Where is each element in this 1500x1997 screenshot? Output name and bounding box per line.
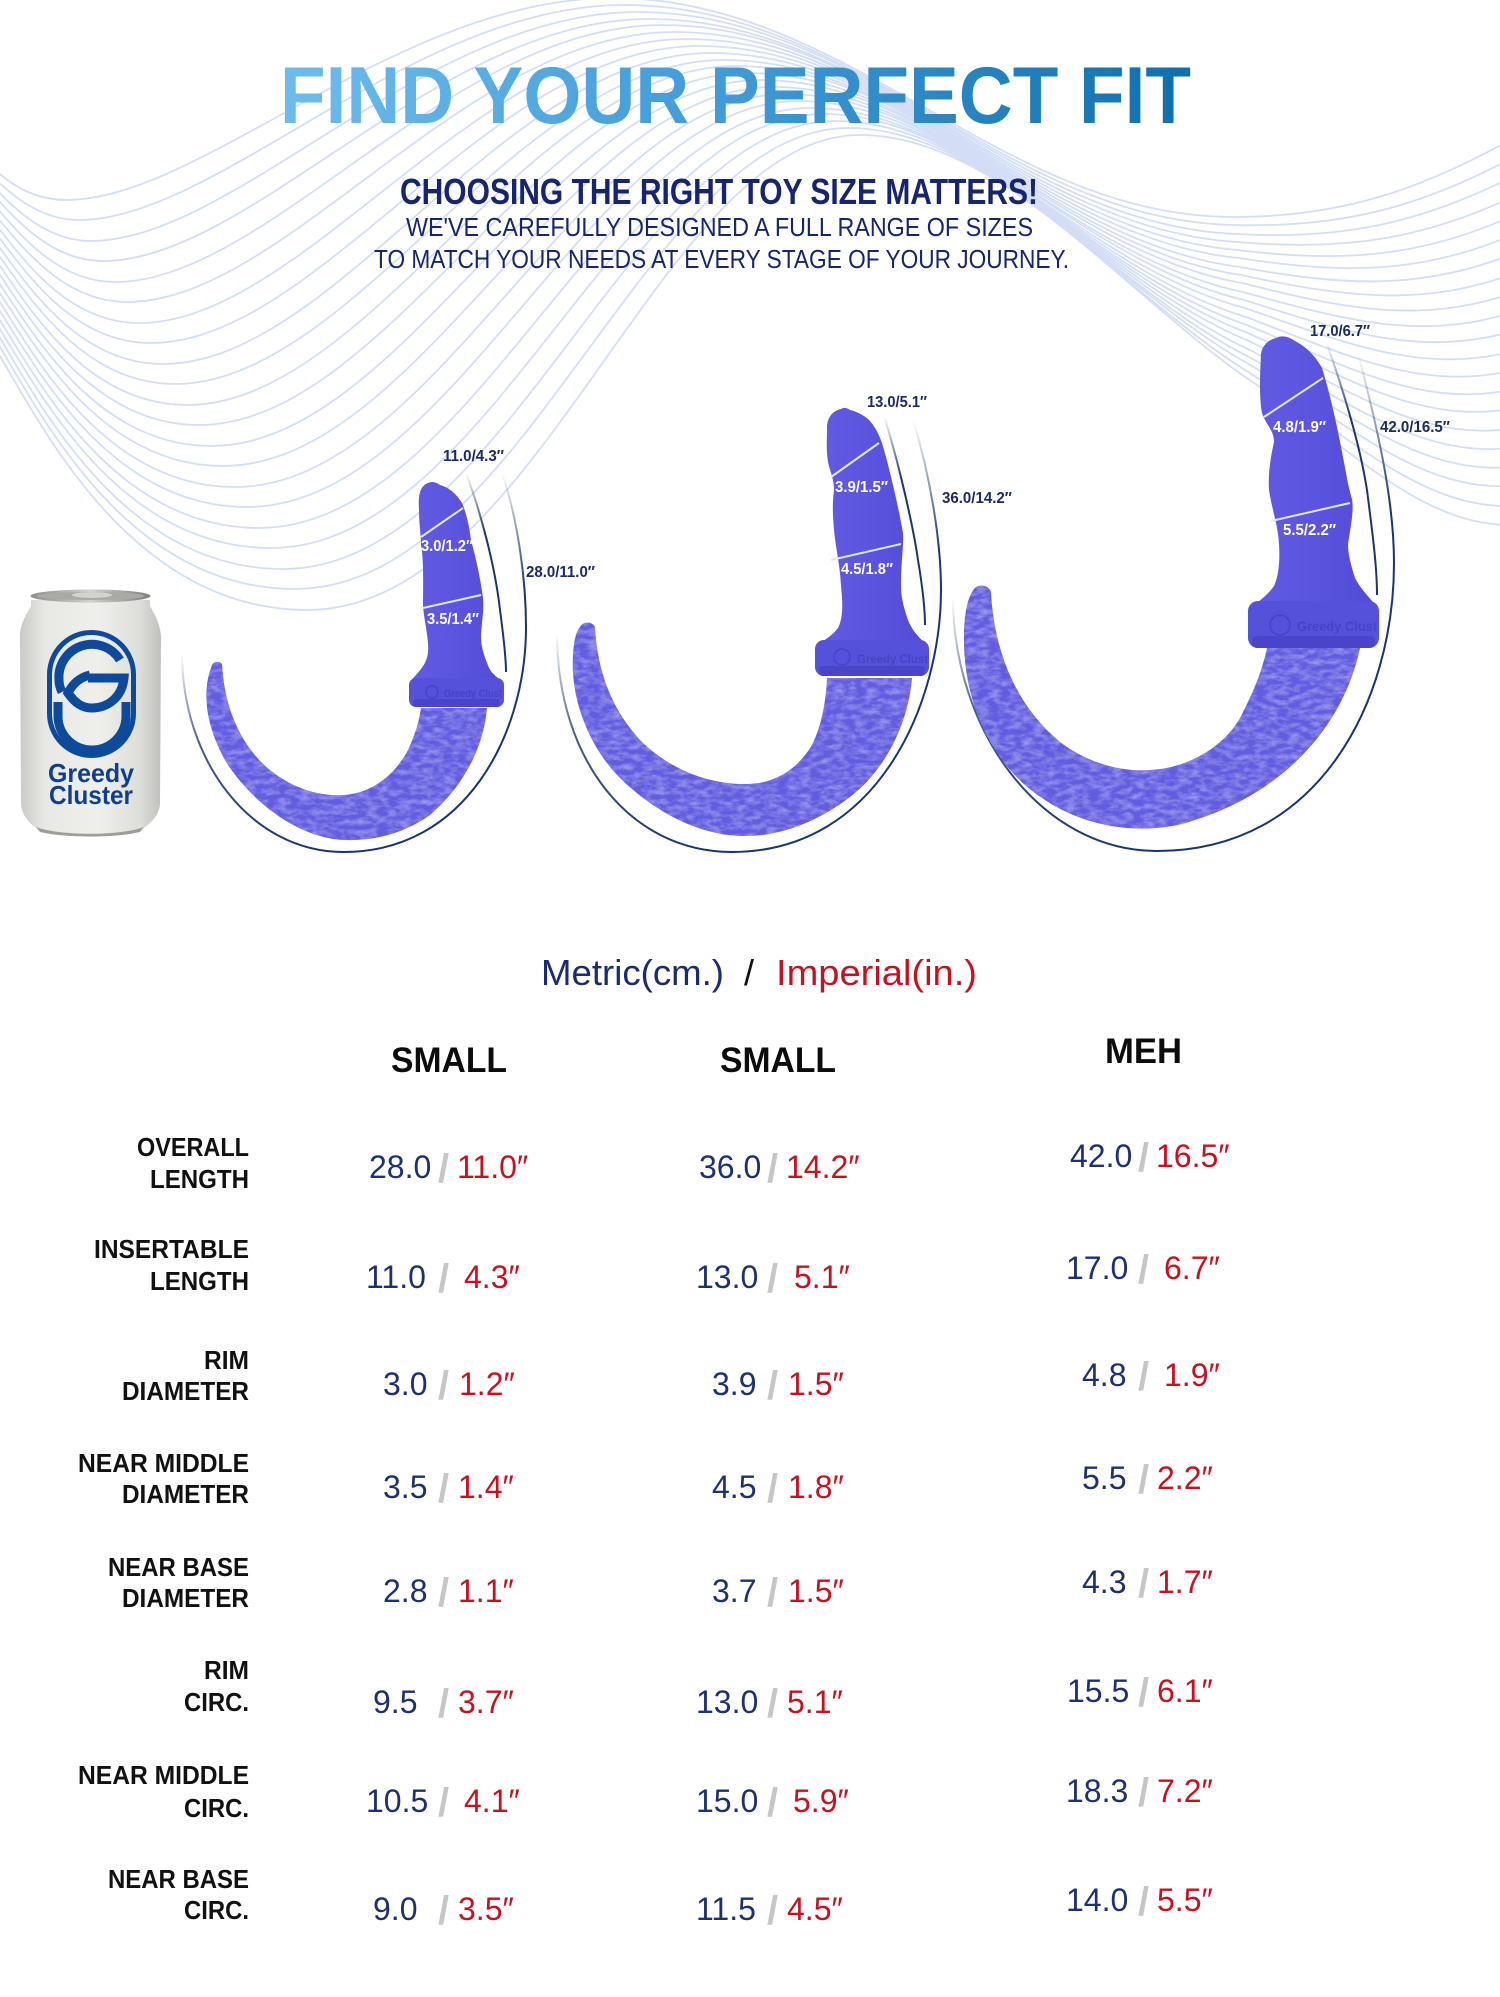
icon: size reference can: Cluster xyxy=(49,780,133,810)
row: overall length: 28.0 xyxy=(369,1149,431,1185)
row: near middle diameter xyxy=(78,1448,1213,1511)
rim label: 3.9/1.5″ xyxy=(835,479,888,496)
unit legend: Imperial(in.) xyxy=(776,952,977,993)
body xyxy=(1250,336,1378,608)
icon: size reference can xyxy=(20,590,161,836)
rim label: 3.0/1.2″ xyxy=(421,538,473,555)
row: rim diameter: / xyxy=(438,1364,449,1408)
row: rim circumference: / xyxy=(1138,1671,1149,1715)
row: near base circumference: 4.5″ xyxy=(787,1891,843,1927)
row: rim circumference: 3.7″ xyxy=(458,1684,514,1720)
row: near middle diameter: DIAMETER xyxy=(122,1479,249,1509)
row: near middle circumference: 18.3 xyxy=(1066,1773,1128,1809)
body xyxy=(816,408,928,646)
unit legend: Metric(cm.) xyxy=(541,952,724,993)
row: rim circumference: 9.5 xyxy=(373,1684,417,1720)
middle label: 4.5/1.8″ xyxy=(841,561,893,578)
row: insertable length: LENGTH xyxy=(150,1266,249,1296)
row: near middle diameter: NEAR MIDDLE xyxy=(78,1448,249,1478)
intro line 2: TO MATCH YOUR NEEDS AT EVERY STAGE OF YOUR JOURNEY. xyxy=(374,244,1069,274)
tail xyxy=(206,662,487,840)
collar xyxy=(815,640,929,676)
row: rim diameter: 1.5″ xyxy=(788,1366,844,1402)
middle label: 3.5/1.4″ xyxy=(427,611,479,628)
row: rim diameter: / xyxy=(1138,1355,1149,1399)
row: insertable length xyxy=(94,1234,1220,1301)
row: near base circumference: CIRC. xyxy=(184,1895,249,1925)
collar brand: Greedy Clust xyxy=(444,688,502,700)
length arcs xyxy=(953,341,1394,851)
row: near middle diameter: 1.8″ xyxy=(788,1469,844,1505)
row: near base circumference: 5.5″ xyxy=(1157,1882,1213,1918)
intro text block xyxy=(374,171,1069,274)
product illustration: size 2 xyxy=(557,394,1012,852)
row: near middle circumference: / xyxy=(438,1781,449,1825)
row: rim diameter: 4.8 xyxy=(1082,1357,1126,1393)
row: insertable length: 4.3″ xyxy=(464,1259,520,1295)
unit legend: / xyxy=(744,952,754,993)
overall length label: 42.0/16.5″ xyxy=(1380,419,1450,436)
row: near middle circumference: 4.1″ xyxy=(464,1783,520,1819)
row: near base diameter xyxy=(108,1552,1213,1615)
row: rim diameter: 1.9″ xyxy=(1164,1357,1220,1393)
row: near middle diameter: 1.4″ xyxy=(458,1469,514,1505)
diameter lines xyxy=(421,508,481,608)
row: rim diameter: RIM xyxy=(204,1345,249,1375)
row: overall length: OVERALL xyxy=(137,1132,249,1162)
row: rim circumference: 6.1″ xyxy=(1157,1673,1213,1709)
row: near middle circumference: 5.9″ xyxy=(793,1783,849,1819)
row: near base circumference: / xyxy=(438,1889,449,1933)
rim label: 4.8/1.9″ xyxy=(1273,419,1326,436)
collar xyxy=(409,678,504,707)
row: near middle diameter: 2.2″ xyxy=(1157,1460,1213,1496)
row: overall length: / xyxy=(1138,1136,1149,1180)
row: near middle diameter: 3.5 xyxy=(383,1469,427,1505)
diameter lines xyxy=(1264,378,1350,521)
insertable length label: 11.0/4.3″ xyxy=(443,448,504,465)
row: overall length: 11.0″ xyxy=(457,1149,528,1185)
row: rim circumference: 15.5 xyxy=(1067,1673,1129,1709)
row: rim diameter: 3.9 xyxy=(712,1366,756,1402)
row: rim circumference xyxy=(184,1655,1213,1726)
diameter lines xyxy=(831,443,901,560)
row: near base diameter: / xyxy=(438,1571,449,1615)
row: insertable length: 13.0 xyxy=(696,1259,758,1295)
row: overall length: LENGTH xyxy=(150,1164,249,1194)
tail xyxy=(573,622,912,836)
insertable length label: 17.0/6.7″ xyxy=(1310,323,1370,340)
row: rim diameter: 1.2″ xyxy=(459,1366,515,1402)
row: rim diameter: / xyxy=(767,1364,778,1408)
row: near base diameter: / xyxy=(767,1571,778,1615)
row: near base diameter: 3.7 xyxy=(712,1573,756,1609)
row: near middle diameter: 5.5 xyxy=(1082,1460,1126,1496)
row: near middle circumference: 15.0 xyxy=(696,1783,758,1819)
product illustration: size 3 xyxy=(953,323,1450,851)
row: rim circumference: CIRC. xyxy=(184,1687,249,1717)
row: insertable length: 6.7″ xyxy=(1164,1250,1220,1286)
row: near middle circumference: 10.5 xyxy=(366,1783,428,1819)
row: near middle circumference: NEAR MIDDLE xyxy=(78,1760,249,1790)
title: FIND YOUR PERFECT FIT xyxy=(280,51,1191,141)
row: near base circumference: NEAR BASE xyxy=(108,1864,249,1894)
row: overall length: 16.5″ xyxy=(1156,1138,1230,1174)
row: rim circumference: / xyxy=(767,1682,778,1726)
row: overall length: 36.0 xyxy=(699,1149,761,1185)
middle label: 5.5/2.2″ xyxy=(1283,522,1336,539)
row: insertable length: / xyxy=(1138,1248,1149,1292)
row: near middle diameter: 4.5 xyxy=(712,1469,756,1505)
row: near middle circumference: / xyxy=(767,1781,778,1825)
row: overall length: 42.0 xyxy=(1070,1138,1132,1174)
row: near base circumference: / xyxy=(767,1889,778,1933)
row: near middle circumference: 7.2″ xyxy=(1157,1773,1213,1809)
product illustration: size 1 xyxy=(182,448,595,852)
row: near base diameter: NEAR BASE xyxy=(108,1552,249,1582)
row: near base diameter: 1.5″ xyxy=(788,1573,844,1609)
collar xyxy=(1248,601,1379,648)
length arcs xyxy=(182,473,526,852)
collar brand: Greedy Clust xyxy=(857,652,928,666)
row: near middle diameter: / xyxy=(1138,1458,1149,1502)
row: overall length: / xyxy=(438,1147,449,1191)
row: insertable length: / xyxy=(438,1257,449,1301)
row: near middle circumference xyxy=(78,1760,1213,1825)
row: rim diameter: 3.0 xyxy=(383,1366,427,1402)
row: insertable length: / xyxy=(767,1257,778,1301)
row: near base circumference: 11.5 xyxy=(696,1891,756,1927)
column headers xyxy=(391,1032,1182,1080)
row: rim diameter xyxy=(122,1345,1220,1408)
column headers: MEH xyxy=(1105,1032,1182,1071)
row: rim circumference: 5.1″ xyxy=(787,1684,843,1720)
row: near base circumference: / xyxy=(1138,1880,1149,1924)
row: near base diameter: 4.3 xyxy=(1082,1564,1126,1600)
row: near base diameter: 2.8 xyxy=(383,1573,427,1609)
icon: size reference can: Greedy xyxy=(48,758,135,788)
tail xyxy=(964,586,1360,829)
row: overall length: 14.2″ xyxy=(786,1149,860,1185)
row: near base circumference: 3.5″ xyxy=(458,1891,514,1927)
row: near base circumference: 14.0 xyxy=(1066,1882,1128,1918)
row: overall length: / xyxy=(767,1147,778,1191)
row: near middle diameter: / xyxy=(438,1467,449,1511)
row: near middle circumference: / xyxy=(1138,1771,1149,1815)
row: overall length xyxy=(137,1132,1230,1194)
row: near base diameter: 1.1″ xyxy=(458,1573,514,1609)
row: rim circumference: / xyxy=(438,1682,449,1726)
row: near base circumference xyxy=(108,1864,1213,1933)
length arcs xyxy=(557,416,941,852)
column headers: SMALL xyxy=(391,1041,507,1080)
row: near base diameter: / xyxy=(1138,1562,1149,1606)
row: insertable length: 5.1″ xyxy=(794,1259,850,1295)
row: near middle diameter: / xyxy=(767,1467,778,1511)
row: near base circumference: 9.0 xyxy=(373,1891,417,1927)
row: near base diameter: DIAMETER xyxy=(122,1583,249,1613)
insertable length label: 13.0/5.1″ xyxy=(867,394,927,411)
row: rim circumference: RIM xyxy=(204,1655,249,1685)
overall length label: 36.0/14.2″ xyxy=(942,490,1012,507)
row: near middle circumference: CIRC. xyxy=(184,1793,249,1823)
column headers: SMALL xyxy=(720,1041,836,1080)
unit legend xyxy=(541,952,977,993)
intro line 1: WE'VE CAREFULLY DESIGNED A FULL RANGE OF SIZES xyxy=(406,212,1033,242)
row: insertable length: INSERTABLE xyxy=(94,1234,249,1264)
body xyxy=(410,482,503,682)
row: insertable length: 17.0 xyxy=(1066,1250,1128,1286)
row: insertable length: 11.0 xyxy=(366,1259,426,1295)
row: rim diameter: DIAMETER xyxy=(122,1376,249,1406)
overall length label: 28.0/11.0″ xyxy=(526,564,595,581)
collar brand: Greedy Clust xyxy=(1297,618,1377,634)
row: near base diameter: 1.7″ xyxy=(1157,1564,1213,1600)
subheading: CHOOSING THE RIGHT TOY SIZE MATTERS! xyxy=(400,171,1038,212)
row: rim circumference: 13.0 xyxy=(696,1684,758,1720)
background: flowing wave lines xyxy=(0,0,1500,610)
